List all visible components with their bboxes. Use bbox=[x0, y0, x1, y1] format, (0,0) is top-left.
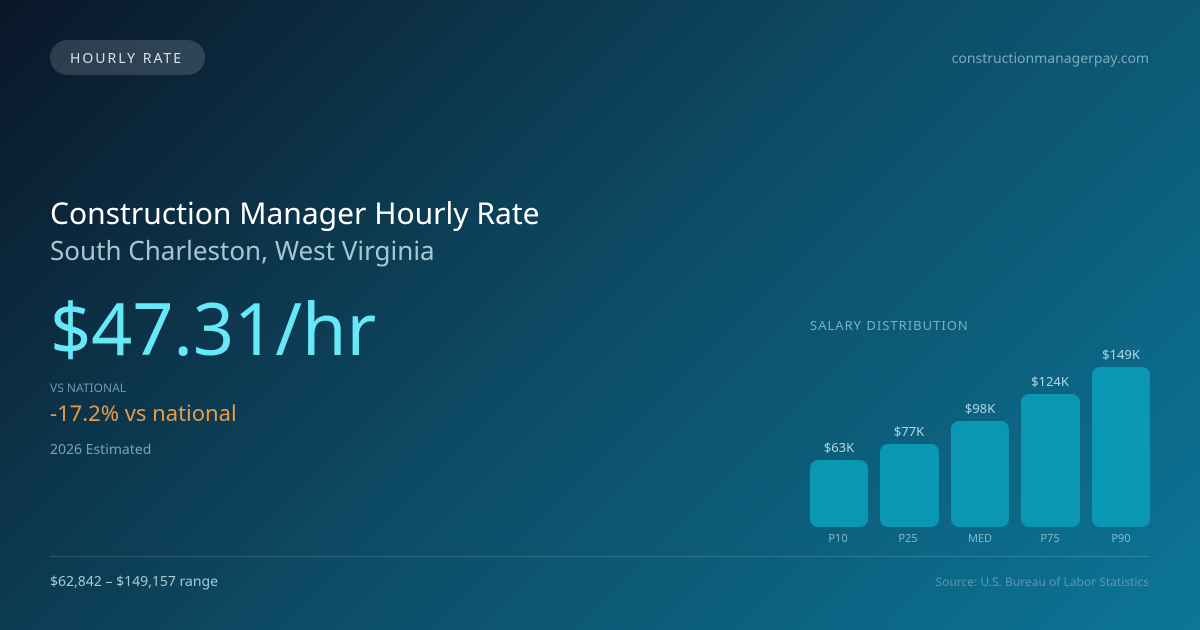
estimate note: 2026 Estimated bbox=[50, 440, 151, 459]
badge: hourly rate bbox=[50, 40, 205, 75]
value: P75: $124K bbox=[1031, 372, 1069, 390]
hourly rate value: $47.31/hr bbox=[50, 279, 376, 377]
salary range: $62,842 – $149,157 range bbox=[50, 572, 218, 591]
value: P90: $149K bbox=[1102, 345, 1140, 363]
bar: P75 bbox=[1021, 394, 1080, 527]
label: median: MED bbox=[968, 531, 992, 546]
label: P10: P10 bbox=[828, 531, 848, 546]
label: P75: P75 bbox=[1040, 531, 1060, 546]
value: P25: $77K bbox=[894, 422, 924, 440]
value: median: $98K bbox=[965, 399, 995, 417]
badge: hourly rate: HOURLY RATE bbox=[70, 49, 183, 68]
bar: P10 bbox=[810, 460, 868, 527]
bar: P25 bbox=[880, 444, 939, 527]
comparison label: VS NATIONAL bbox=[50, 379, 126, 396]
label: P25: P25 bbox=[898, 531, 918, 546]
comparison value: -17.2% vs national bbox=[50, 398, 237, 428]
chart heading: SALARY DISTRIBUTION bbox=[810, 316, 969, 334]
bar: P90 bbox=[1092, 367, 1150, 527]
title: Construction Manager Hourly Rate bbox=[50, 192, 540, 233]
subtitle: South Charleston, West Virginia bbox=[50, 232, 435, 268]
bar: median bbox=[951, 421, 1009, 527]
label: P90: P90 bbox=[1111, 531, 1131, 546]
site domain: constructionmanagerpay.com bbox=[952, 49, 1149, 68]
source: Source: U.S. Bureau of Labor Statistics bbox=[936, 573, 1149, 590]
value: P10: $63K bbox=[824, 438, 854, 456]
